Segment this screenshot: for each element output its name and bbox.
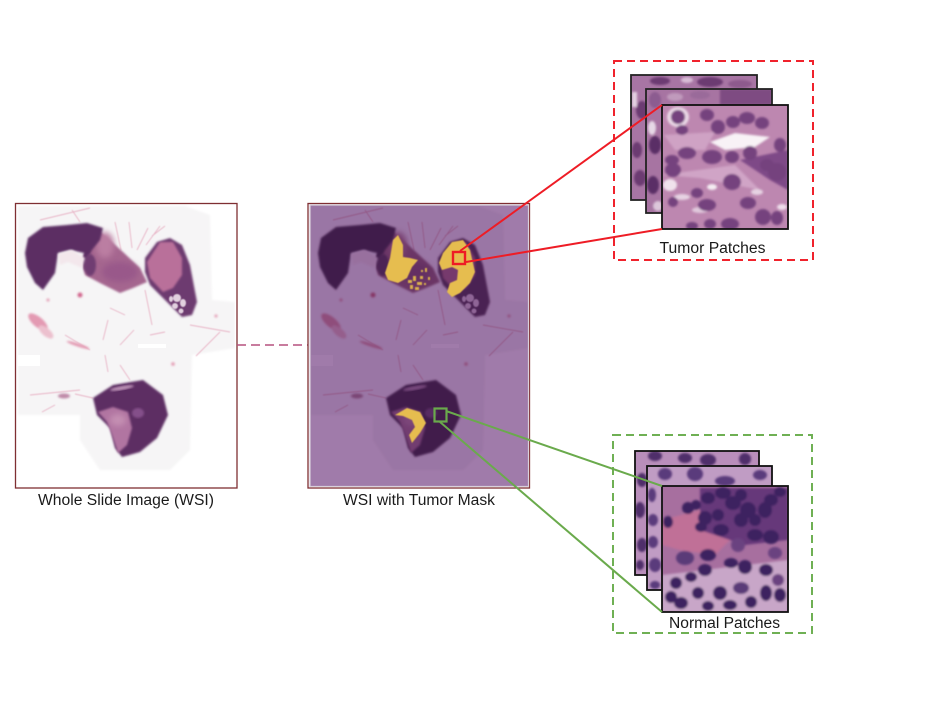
tumor mask: yellow regions (385, 235, 475, 443)
connector: dashed line between slide panels (237, 344, 308, 346)
patch: front tumor patch (662, 105, 788, 230)
box: red dashed outline (614, 61, 813, 260)
patch: back normal patch (635, 451, 759, 575)
callout: red tumor region selector with lines (453, 105, 662, 264)
panel: whole slide image (16, 204, 237, 509)
patch: back tumor patch (631, 75, 757, 200)
inset: pale inner edge (310, 205, 528, 486)
patch: middle normal patch (647, 466, 772, 590)
label: whole slide image: Whole Slide Image (WSI) (38, 492, 214, 509)
figure: WSI tumor and normal patch extraction diagram (14, 60, 814, 634)
label: mask panel: WSI with Tumor Mask (343, 492, 495, 509)
frame: mask slide border (308, 204, 530, 488)
frame: slide border (16, 204, 237, 488)
callout: green normal region selector with lines (434, 408, 662, 612)
image: H&E stained tissue slide (17, 205, 235, 486)
label: tumor patches: Tumor Patches (660, 240, 766, 257)
patch: front normal patch (662, 486, 788, 612)
panel: normal patches (613, 435, 812, 633)
box: green dashed outline (613, 435, 812, 633)
patch: middle tumor patch (646, 89, 772, 213)
panel: WSI with tumor mask (308, 204, 530, 509)
image: tissue slide under purple overlay (310, 205, 528, 486)
label: normal patches: Normal Patches (669, 615, 780, 632)
panel: tumor patches (614, 61, 813, 260)
